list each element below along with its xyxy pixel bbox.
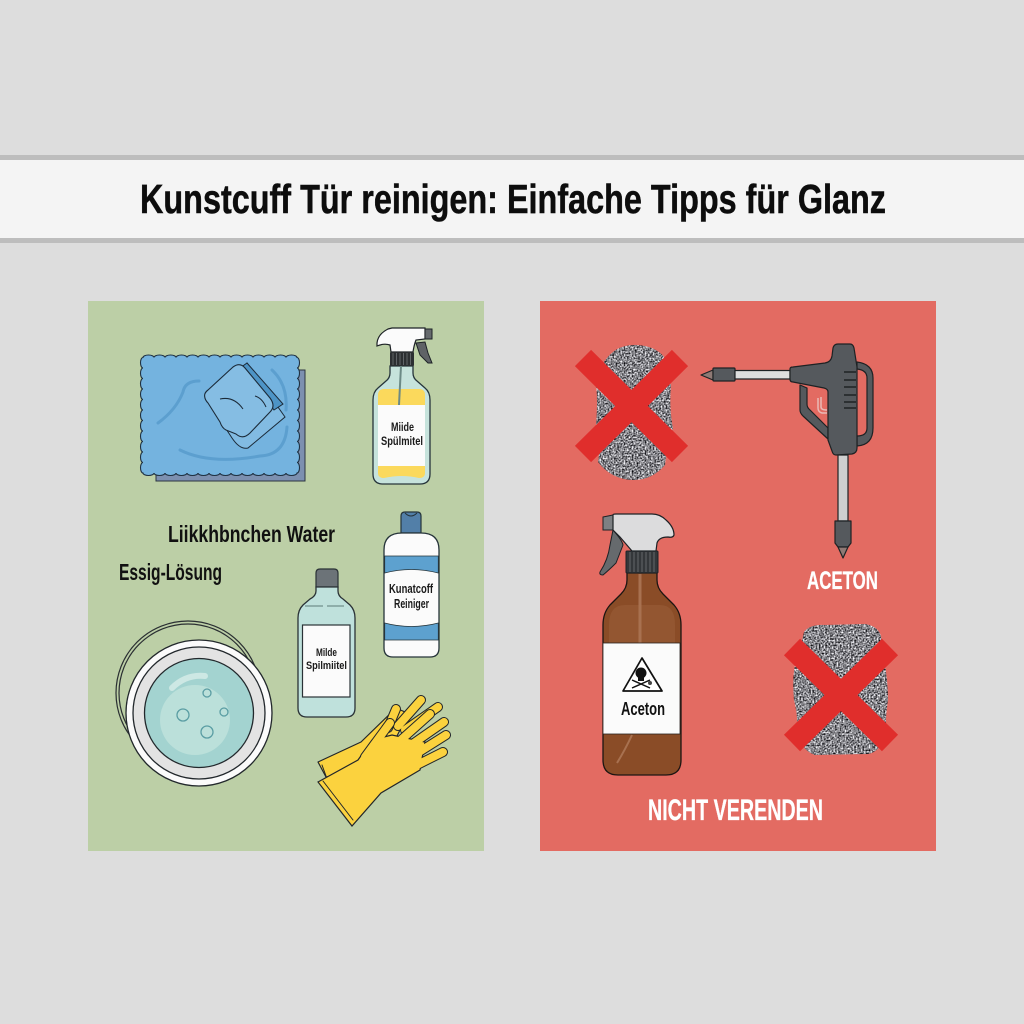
icon: spray bottle mild detergent bbox=[373, 328, 432, 484]
icon: yellow rubber gloves bbox=[318, 700, 446, 826]
label: Kunatcoff Reiniger bbox=[389, 582, 434, 611]
label: Essig-Lösung: Essig-Lösung bbox=[119, 559, 222, 585]
back glove bbox=[318, 700, 438, 777]
label: Miide Spülmitel: Miide bbox=[391, 422, 414, 434]
label: Kunatcoff Reiniger: Kunatcoff bbox=[389, 582, 434, 596]
icon: bowl of water bbox=[116, 621, 272, 786]
icon: crossed-out steel wool pad bbox=[792, 624, 890, 755]
label: ACETON: ACETON bbox=[807, 567, 878, 595]
label: Liikkhbnchen Water: Liikkhbnchen Water bbox=[168, 521, 335, 547]
icon: mild detergent bottle bbox=[298, 569, 355, 717]
title banner bbox=[0, 155, 1024, 243]
label: Kunatcoff Reiniger: Reiniger bbox=[394, 597, 429, 611]
label: Milde Spilmiitel bbox=[306, 647, 347, 672]
front glove bbox=[318, 714, 446, 826]
panel: recommended cleaning supplies bbox=[88, 301, 484, 851]
icon: pressure washer gun bbox=[701, 344, 873, 558]
panel: things to avoid bbox=[540, 301, 936, 851]
icon: toxic warning triangle bbox=[623, 658, 662, 691]
icon: microfibre cloth bbox=[140, 355, 305, 481]
label: Miide Spülmitel: Spülmitel bbox=[381, 436, 423, 448]
label: Milde Spilmiitel: Milde bbox=[316, 647, 337, 659]
label: NICHT VERENDEN: NICHT VERENDEN bbox=[648, 794, 823, 827]
label: Aceton: Aceton bbox=[621, 699, 665, 719]
label: Miide Spülmitel bbox=[381, 422, 423, 448]
label: Milde Spilmiitel: Spilmiitel bbox=[306, 660, 347, 672]
icon: crossed-out scouring sponge bbox=[583, 345, 680, 480]
icon: acetone bottle bbox=[600, 514, 681, 775]
icon: plastic cleaner bottle bbox=[384, 512, 439, 657]
